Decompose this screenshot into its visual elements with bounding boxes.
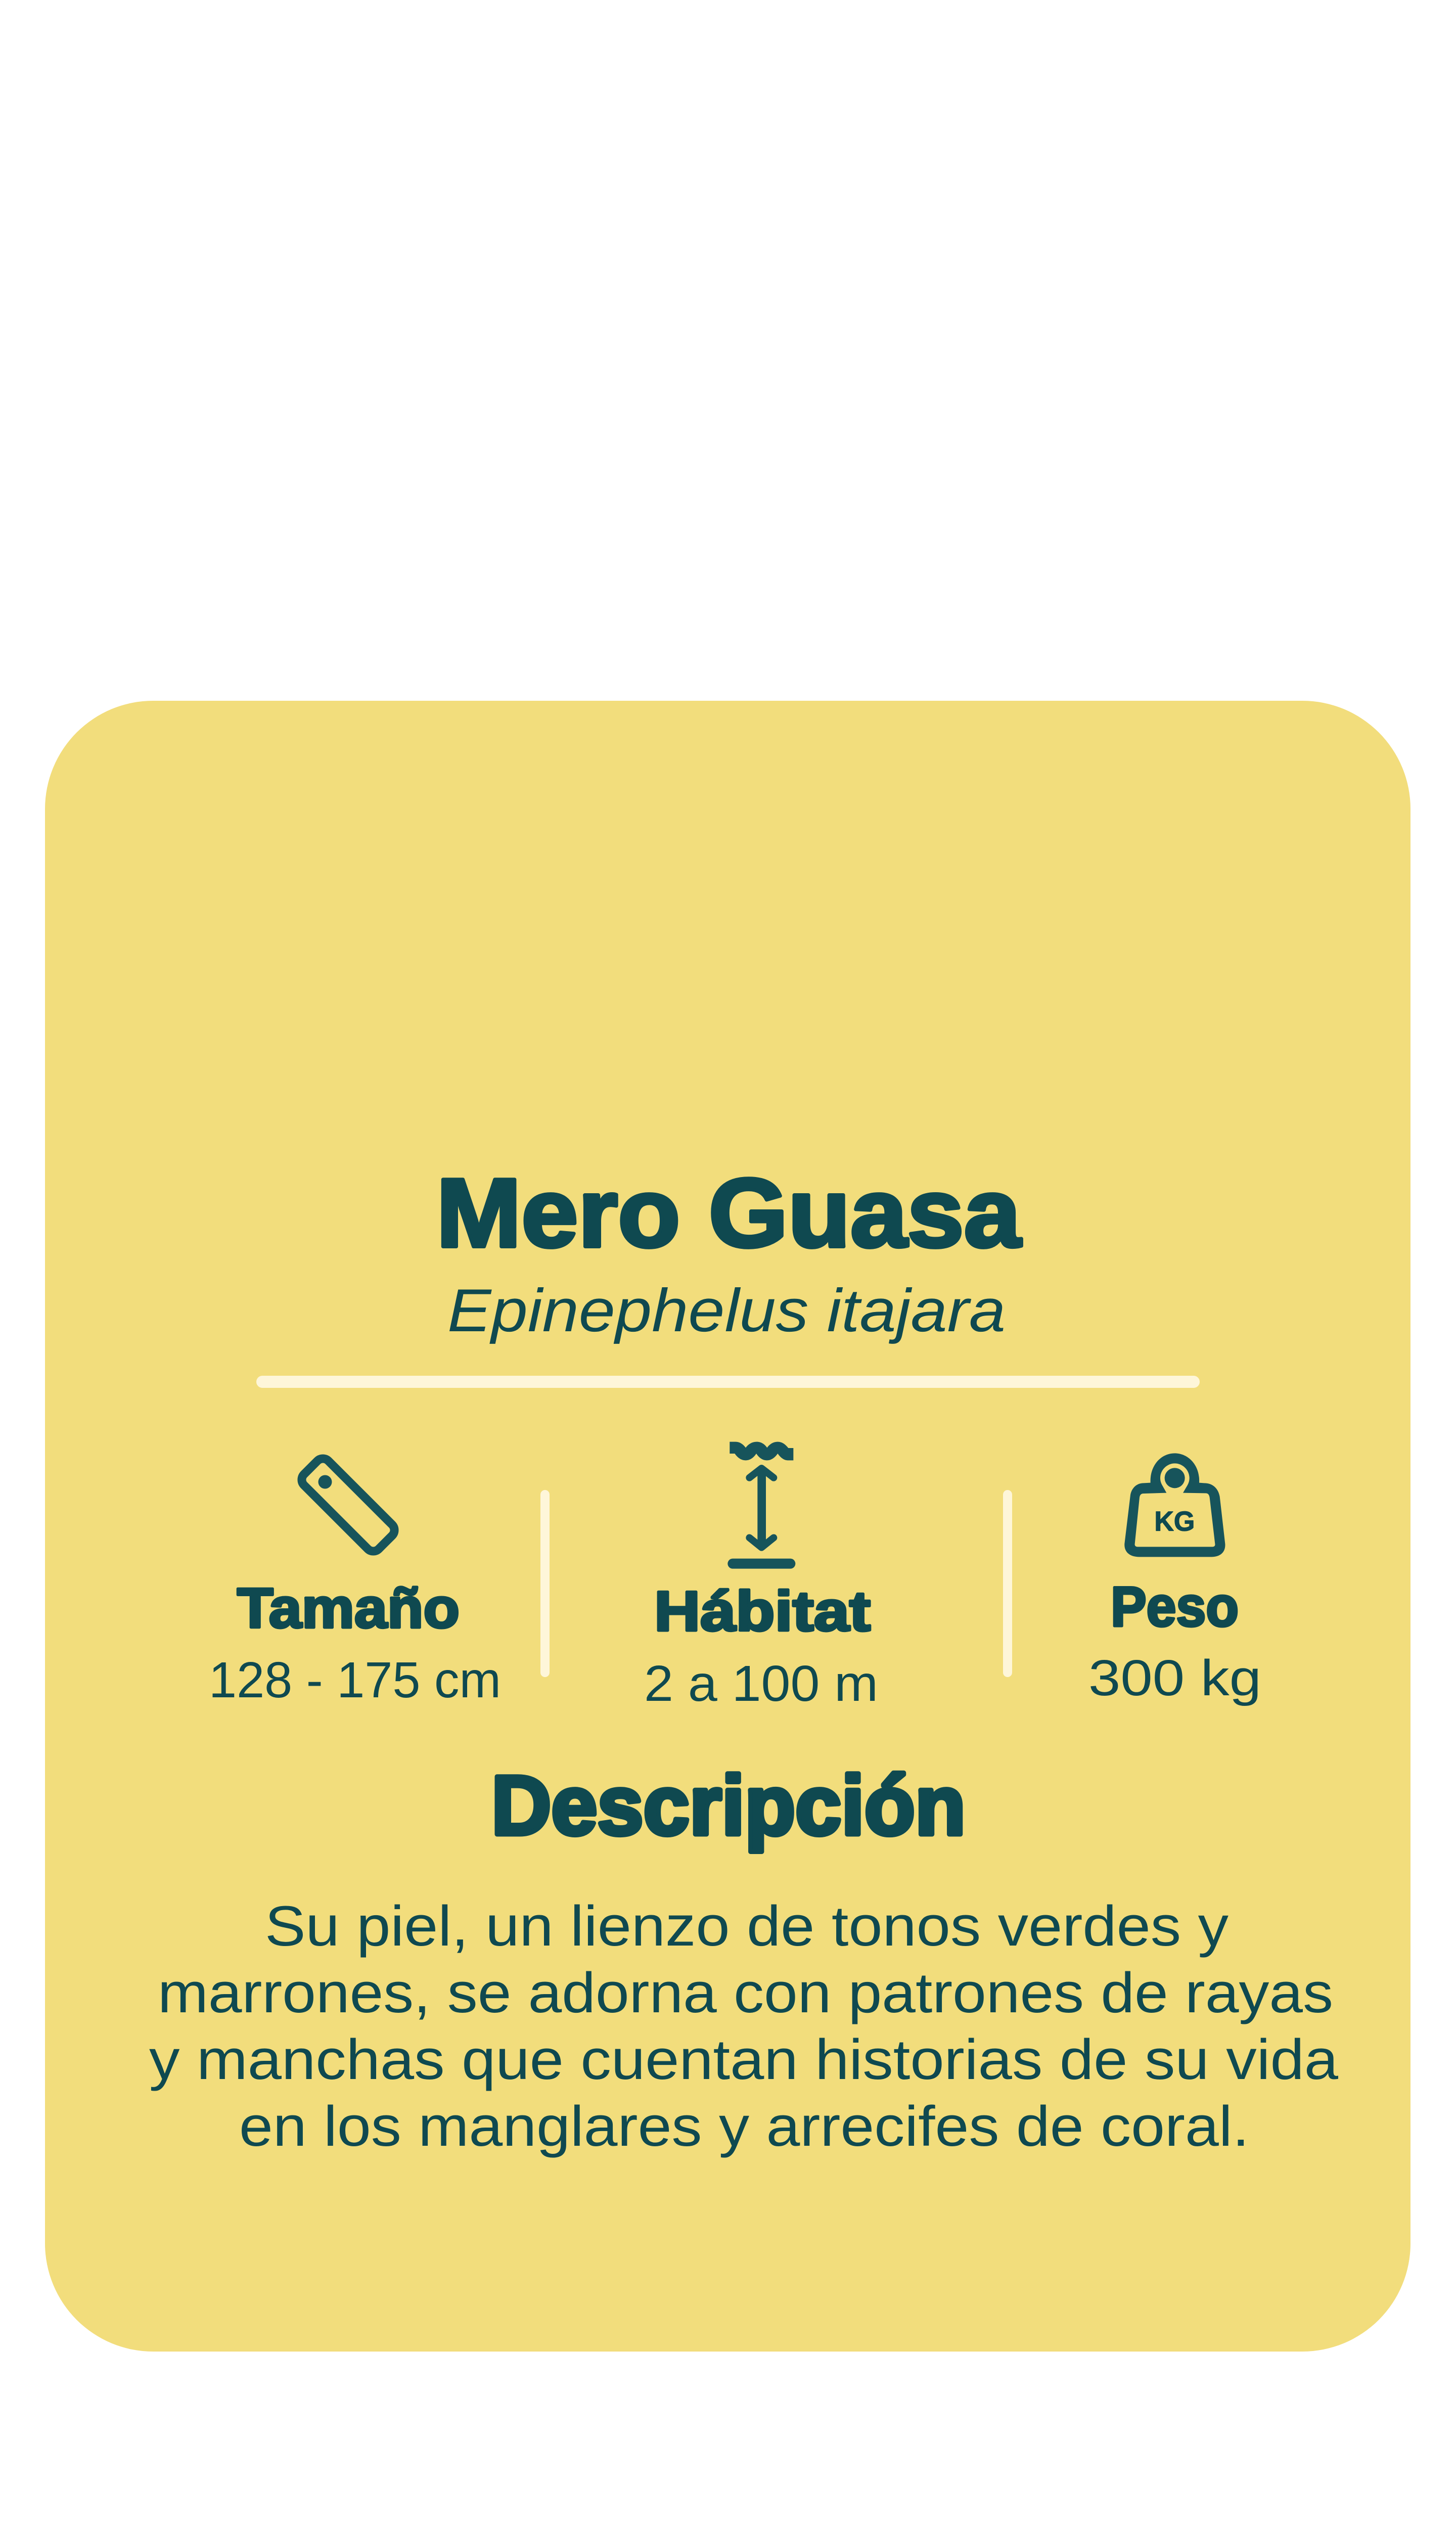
description paragraph: y manchas que cuentan historias de su vida [149, 2028, 1339, 2091]
heading: description: Descripción [491, 1759, 966, 1853]
description paragraph: marrones, se adorna con patrones de rayas [158, 1961, 1333, 2024]
value: weight: 300 kg [1088, 1650, 1261, 1706]
description paragraph: en los manglares y arrecifes de coral. [239, 2095, 1249, 2158]
scientific name: Epinephelus itajara [447, 1277, 1006, 1344]
icon: kettlebell weight [1124, 1453, 1225, 1557]
label: Tamaño: Tamaño [237, 1577, 460, 1640]
stat: size [209, 1456, 501, 1708]
value: size: 128 - 175 cm [209, 1652, 501, 1708]
label: Peso: Peso [1111, 1575, 1239, 1638]
stat: weight [1088, 1453, 1261, 1706]
panel: species card [45, 701, 1410, 2352]
icon: depth arrow [727, 1442, 795, 1569]
icon text: KG: KG [1154, 1506, 1195, 1537]
title: Mero Guasa [436, 1158, 1022, 1267]
description paragraph [149, 1894, 1339, 2158]
title divider [256, 1376, 1200, 1388]
column divider left [540, 1490, 550, 1677]
icon: ruler [299, 1456, 397, 1554]
description paragraph: Su piel, un lienzo de tonos verdes y [265, 1894, 1228, 1958]
column divider right [1003, 1490, 1012, 1677]
label: Hábitat: Hábitat [654, 1580, 871, 1643]
stat: habitat [644, 1442, 878, 1712]
value: depth: 2 a 100 m [644, 1655, 878, 1712]
